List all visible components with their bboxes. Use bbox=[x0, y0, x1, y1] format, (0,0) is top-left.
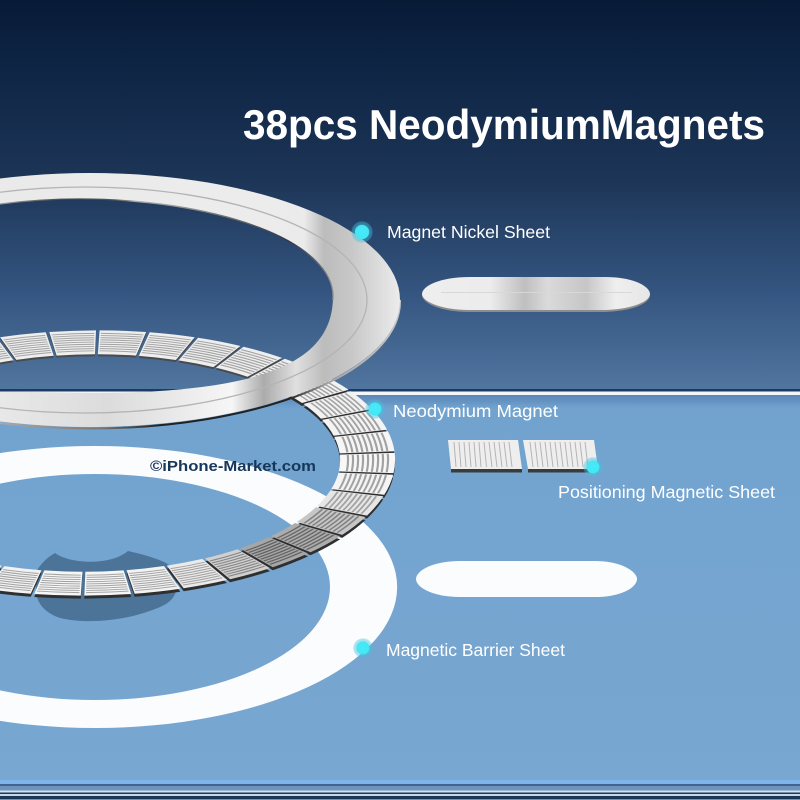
magnetic barrier sheet ring bbox=[0, 446, 397, 728]
white barrier pill bbox=[416, 561, 637, 597]
positioning magnetic sheets bbox=[448, 440, 598, 472]
marker dot bbox=[351, 221, 373, 243]
magnet ring: striped top faces bbox=[0, 330, 403, 596]
shadow under magnets bbox=[36, 551, 177, 621]
label: Neodymium Magnet bbox=[393, 401, 558, 421]
callout: positioning magnetic sheet bbox=[558, 457, 775, 502]
marker dot bbox=[353, 638, 373, 658]
callout: magnetic barrier sheet bbox=[353, 638, 565, 660]
neodymium magnet ring bbox=[0, 330, 403, 599]
marker dot bbox=[583, 457, 603, 477]
background: light lower panel bbox=[0, 395, 800, 780]
label: Positioning Magnetic Sheet bbox=[558, 482, 775, 502]
nickel ring: upper half bbox=[0, 173, 400, 300]
callout: neodymium magnet bbox=[365, 399, 558, 421]
sheet 2 bbox=[523, 440, 598, 472]
magnet ring: thickness of far segments bbox=[0, 332, 284, 380]
panel divider line bbox=[0, 389, 800, 395]
marker dot bbox=[365, 399, 385, 419]
watermark: ©iPhone-Market.com bbox=[150, 459, 316, 475]
title: 38pcs NeodymiumMagnets bbox=[243, 101, 765, 148]
nickel ring: lower half bbox=[0, 300, 400, 427]
pill edge bbox=[422, 278, 650, 312]
sheet 1 bbox=[448, 440, 522, 472]
pill centre line bbox=[441, 292, 632, 294]
nickel ring: dark lower edge bbox=[0, 300, 401, 430]
nickel ring: inner top shadow edge bbox=[0, 198, 334, 300]
positioning nickel pill bbox=[422, 277, 650, 312]
callout: magnet nickel sheet bbox=[351, 221, 550, 243]
pill face bbox=[422, 277, 650, 310]
label: Magnet Nickel Sheet bbox=[387, 222, 550, 242]
nickel ring: groove line bbox=[0, 187, 367, 413]
magnet ring: thickness of near segments bbox=[0, 362, 401, 599]
magnet nickel sheet ring bbox=[0, 173, 400, 428]
background: dark upper panel bbox=[0, 0, 800, 389]
bottom stripe band bbox=[0, 780, 800, 800]
label: Magnetic Barrier Sheet bbox=[386, 640, 565, 660]
